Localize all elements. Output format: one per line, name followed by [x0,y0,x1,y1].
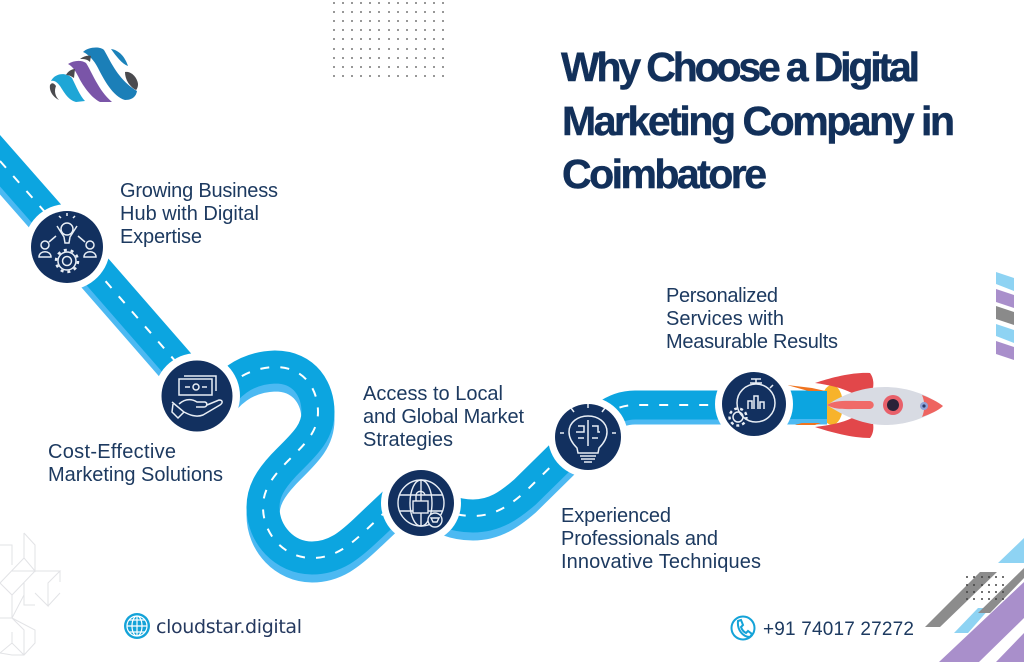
decorative diagonal shapes: bottom right [925,538,1024,662]
road shadow edge [0,146,827,566]
label: experienced professionals [561,505,761,573]
icon: globe [124,613,150,639]
icon: stopwatch chart gear [730,379,775,426]
milestone 3: market strategies [381,463,461,543]
label: experienced professionals: Experienced [561,505,671,527]
road surface [0,138,827,558]
label: cost-effective marketing [48,441,223,486]
title: Why Choose a Digital [561,44,920,90]
label: access to markets: Strategies [363,429,453,451]
decorative line pattern: bottom left [0,533,60,655]
milestone 1: growing business hub [24,204,110,290]
label: growing business hub: Expertise [120,226,202,248]
footer: website: cloudstar.digital [156,616,302,638]
label: growing business hub: Growing Business [120,180,278,202]
dot grid: top [333,2,444,77]
milestone 2: cost-effective [154,353,240,439]
label: experienced professionals: Professionals and [561,528,718,550]
label: access to markets: Access to Local [363,383,503,405]
icon: bulb gears people [39,213,96,272]
title [561,44,955,197]
road: winding route [0,138,827,566]
label: access to markets [363,383,524,451]
label: growing business hub: Hub with Digital [120,203,259,225]
label: experienced professionals: Innovative Techniques [561,551,761,573]
footer: phone: +91 74017 27272 [763,619,914,640]
milestone 5: personalized services [715,365,793,443]
label: access to markets: and Global Market [363,406,524,428]
milestone 4: experienced professionals [548,397,628,477]
icon: brain bulb [560,404,616,462]
label: cost-effective marketing: Marketing Solutions [48,464,223,486]
title: Coimbatore [562,151,767,197]
label: growing business hub [120,180,278,248]
footer: website [124,613,302,639]
label: personalized services: Personalized [666,285,778,307]
icon: globe lock cart [398,480,444,527]
icon: phone [732,616,754,640]
rocket [787,373,943,438]
decorative stripes: right edge [996,272,1014,360]
label: personalized services [666,285,838,353]
label: cost-effective marketing: Cost-Effective [48,441,176,463]
label: personalized services: Services with [666,308,784,330]
lane dashes [0,161,827,558]
title: Marketing Company in [562,98,955,144]
logo: cloud ribbons [50,48,138,102]
icon: money in hand [172,376,222,418]
label: personalized services: Measurable Results [666,331,838,353]
